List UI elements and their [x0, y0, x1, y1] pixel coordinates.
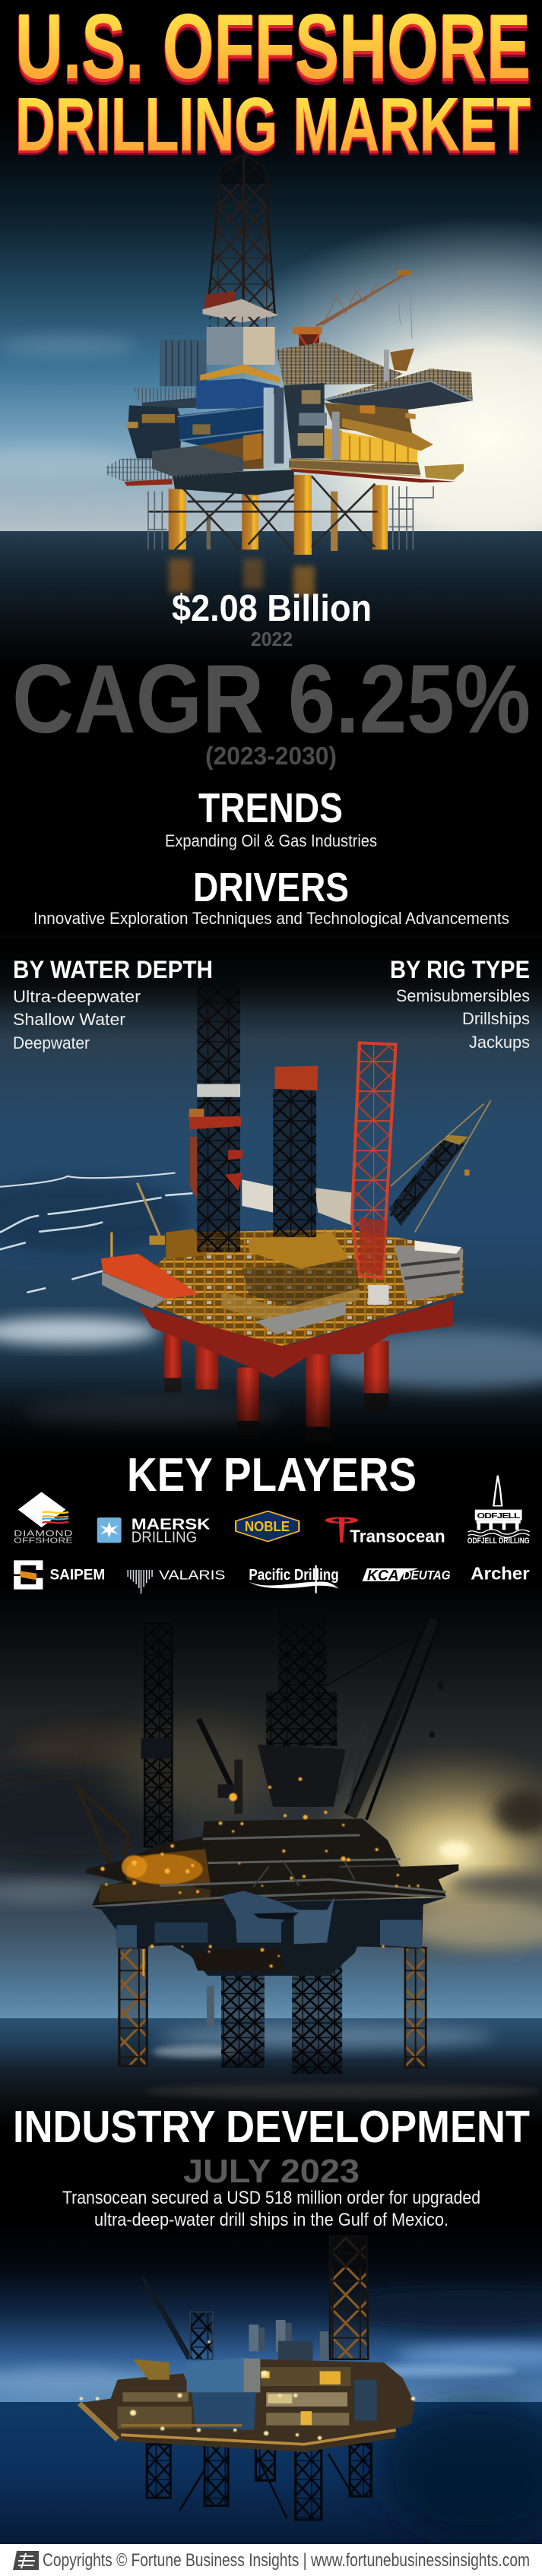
main deck rails	[106, 458, 243, 481]
logo: KCA Deutag: KCA	[367, 1567, 399, 1583]
segment: by rig type: Drillships	[462, 1009, 530, 1028]
deck modules	[76, 2359, 415, 2452]
panel: fixed platform at night	[0, 2084, 542, 2545]
panel: semi-submersible rig over sea	[0, 935, 542, 1459]
logo: Diamond Offshore	[14, 1492, 73, 1545]
lights	[100, 1777, 420, 1967]
legs	[169, 489, 186, 549]
legs	[164, 1334, 182, 1392]
logo: Maersk Drilling: MAERSK	[132, 1516, 211, 1533]
market value: $2.08 Billion	[172, 588, 372, 629]
logo: Saipem	[14, 1560, 105, 1590]
illustration: rig decks and lights	[76, 1777, 458, 1976]
illustration: platform decks and legs	[106, 327, 473, 555]
logo: Valaris: VALARIS	[159, 1568, 225, 1582]
panel: jackup rig at dusk	[0, 1581, 542, 2132]
segment: by rig type: Jackups	[469, 1033, 530, 1052]
logo: Transocean	[325, 1517, 445, 1546]
deck	[149, 1229, 463, 1346]
heading: key players: KEY PLAYERS	[127, 1449, 417, 1502]
logo: Noble: NOBLE	[245, 1518, 290, 1534]
logo: Diamond Offshore: OFFSHORE	[14, 1536, 73, 1545]
drivers	[33, 865, 509, 928]
right modules	[284, 383, 325, 458]
drivers: DRIVERS	[193, 865, 349, 910]
trends: TRENDS	[198, 784, 343, 831]
segment: by rig type: Semisubmersibles	[396, 986, 530, 1005]
crane right	[389, 1137, 463, 1226]
logos	[14, 1476, 530, 1593]
red hull	[138, 1300, 453, 1378]
segment: by rig type	[390, 956, 530, 1052]
segment: by water depth: Ultra-deepwater	[13, 987, 141, 1006]
helideck	[101, 1254, 198, 1299]
crane	[142, 2277, 192, 2359]
crane cab	[293, 327, 322, 334]
logo: Maersk Drilling	[97, 1516, 211, 1546]
segment: by rig type: BY RIG TYPE	[390, 956, 530, 983]
segment: by water depth: Deepwater	[13, 1033, 90, 1052]
crane left	[138, 1183, 160, 1236]
illustration: derrick and crane	[202, 155, 412, 339]
segment: by water depth: Shallow Water	[13, 1010, 125, 1029]
stacks	[249, 2324, 258, 2351]
drivers: Innovative Exploration Techniques and Technological Advancements	[33, 909, 509, 928]
market value: 2022	[251, 628, 293, 650]
date: July 2023: JULY 2023	[183, 2153, 360, 2190]
footer	[0, 2544, 542, 2576]
panel: key players	[14, 1449, 530, 1593]
water reflections	[169, 559, 315, 597]
towers	[197, 979, 240, 1084]
trends	[165, 784, 377, 850]
logo: Transocean: Transocean	[350, 1526, 445, 1546]
trends: Expanding Oil & Gas Industries	[165, 831, 377, 850]
logo: Pacific Drilling	[249, 1565, 339, 1593]
panel: hero photo of offshore platform	[0, 106, 542, 672]
icon: Fortune Business Insights logo	[13, 2551, 39, 2570]
logo: KCA Deutag	[363, 1567, 450, 1583]
upper blocks	[160, 340, 207, 386]
illustration: red rig	[0, 979, 491, 1444]
illustration: rig upper towers and legs	[119, 1606, 443, 2074]
logo: Saipem: SAIPEM	[49, 1566, 105, 1582]
blue modules	[196, 378, 280, 409]
derrick	[330, 2236, 368, 2359]
legs	[147, 2445, 170, 2498]
logo: Odfjell Drilling	[468, 1476, 530, 1545]
logo: Diamond Offshore: DIAMOND	[14, 1529, 73, 1538]
logo: KCA Deutag: DEUTAG	[403, 1568, 450, 1583]
segment: by water depth: BY WATER DEPTH	[13, 956, 213, 983]
logo: Maersk Drilling: DRILLING	[132, 1529, 197, 1546]
segment: by water depth	[13, 956, 213, 1052]
development description: Transocean secured a USD 518 million order for upgraded	[62, 2188, 480, 2208]
CAGR figure: (2023-2030)	[205, 742, 337, 770]
machinery	[276, 342, 403, 385]
development description	[62, 2188, 480, 2230]
underdeck	[173, 470, 294, 495]
logo: Noble	[236, 1511, 299, 1542]
tiers	[86, 1818, 458, 1907]
upper right deck	[325, 369, 473, 400]
hull	[91, 1897, 446, 1976]
clouds above the night panel	[144, 2084, 540, 2099]
development description: ultra-deep-water drill ships in the Gulf of Mexico.	[94, 2210, 448, 2230]
title	[15, 0, 531, 171]
logo: Pacific Drilling: Pacific Drilling	[249, 1566, 339, 1584]
logo: Odfjell Drilling: ODFJELL	[477, 1511, 520, 1520]
illustration: night platform	[76, 2236, 415, 2520]
logo: Valaris	[128, 1568, 225, 1593]
market value	[172, 588, 372, 650]
